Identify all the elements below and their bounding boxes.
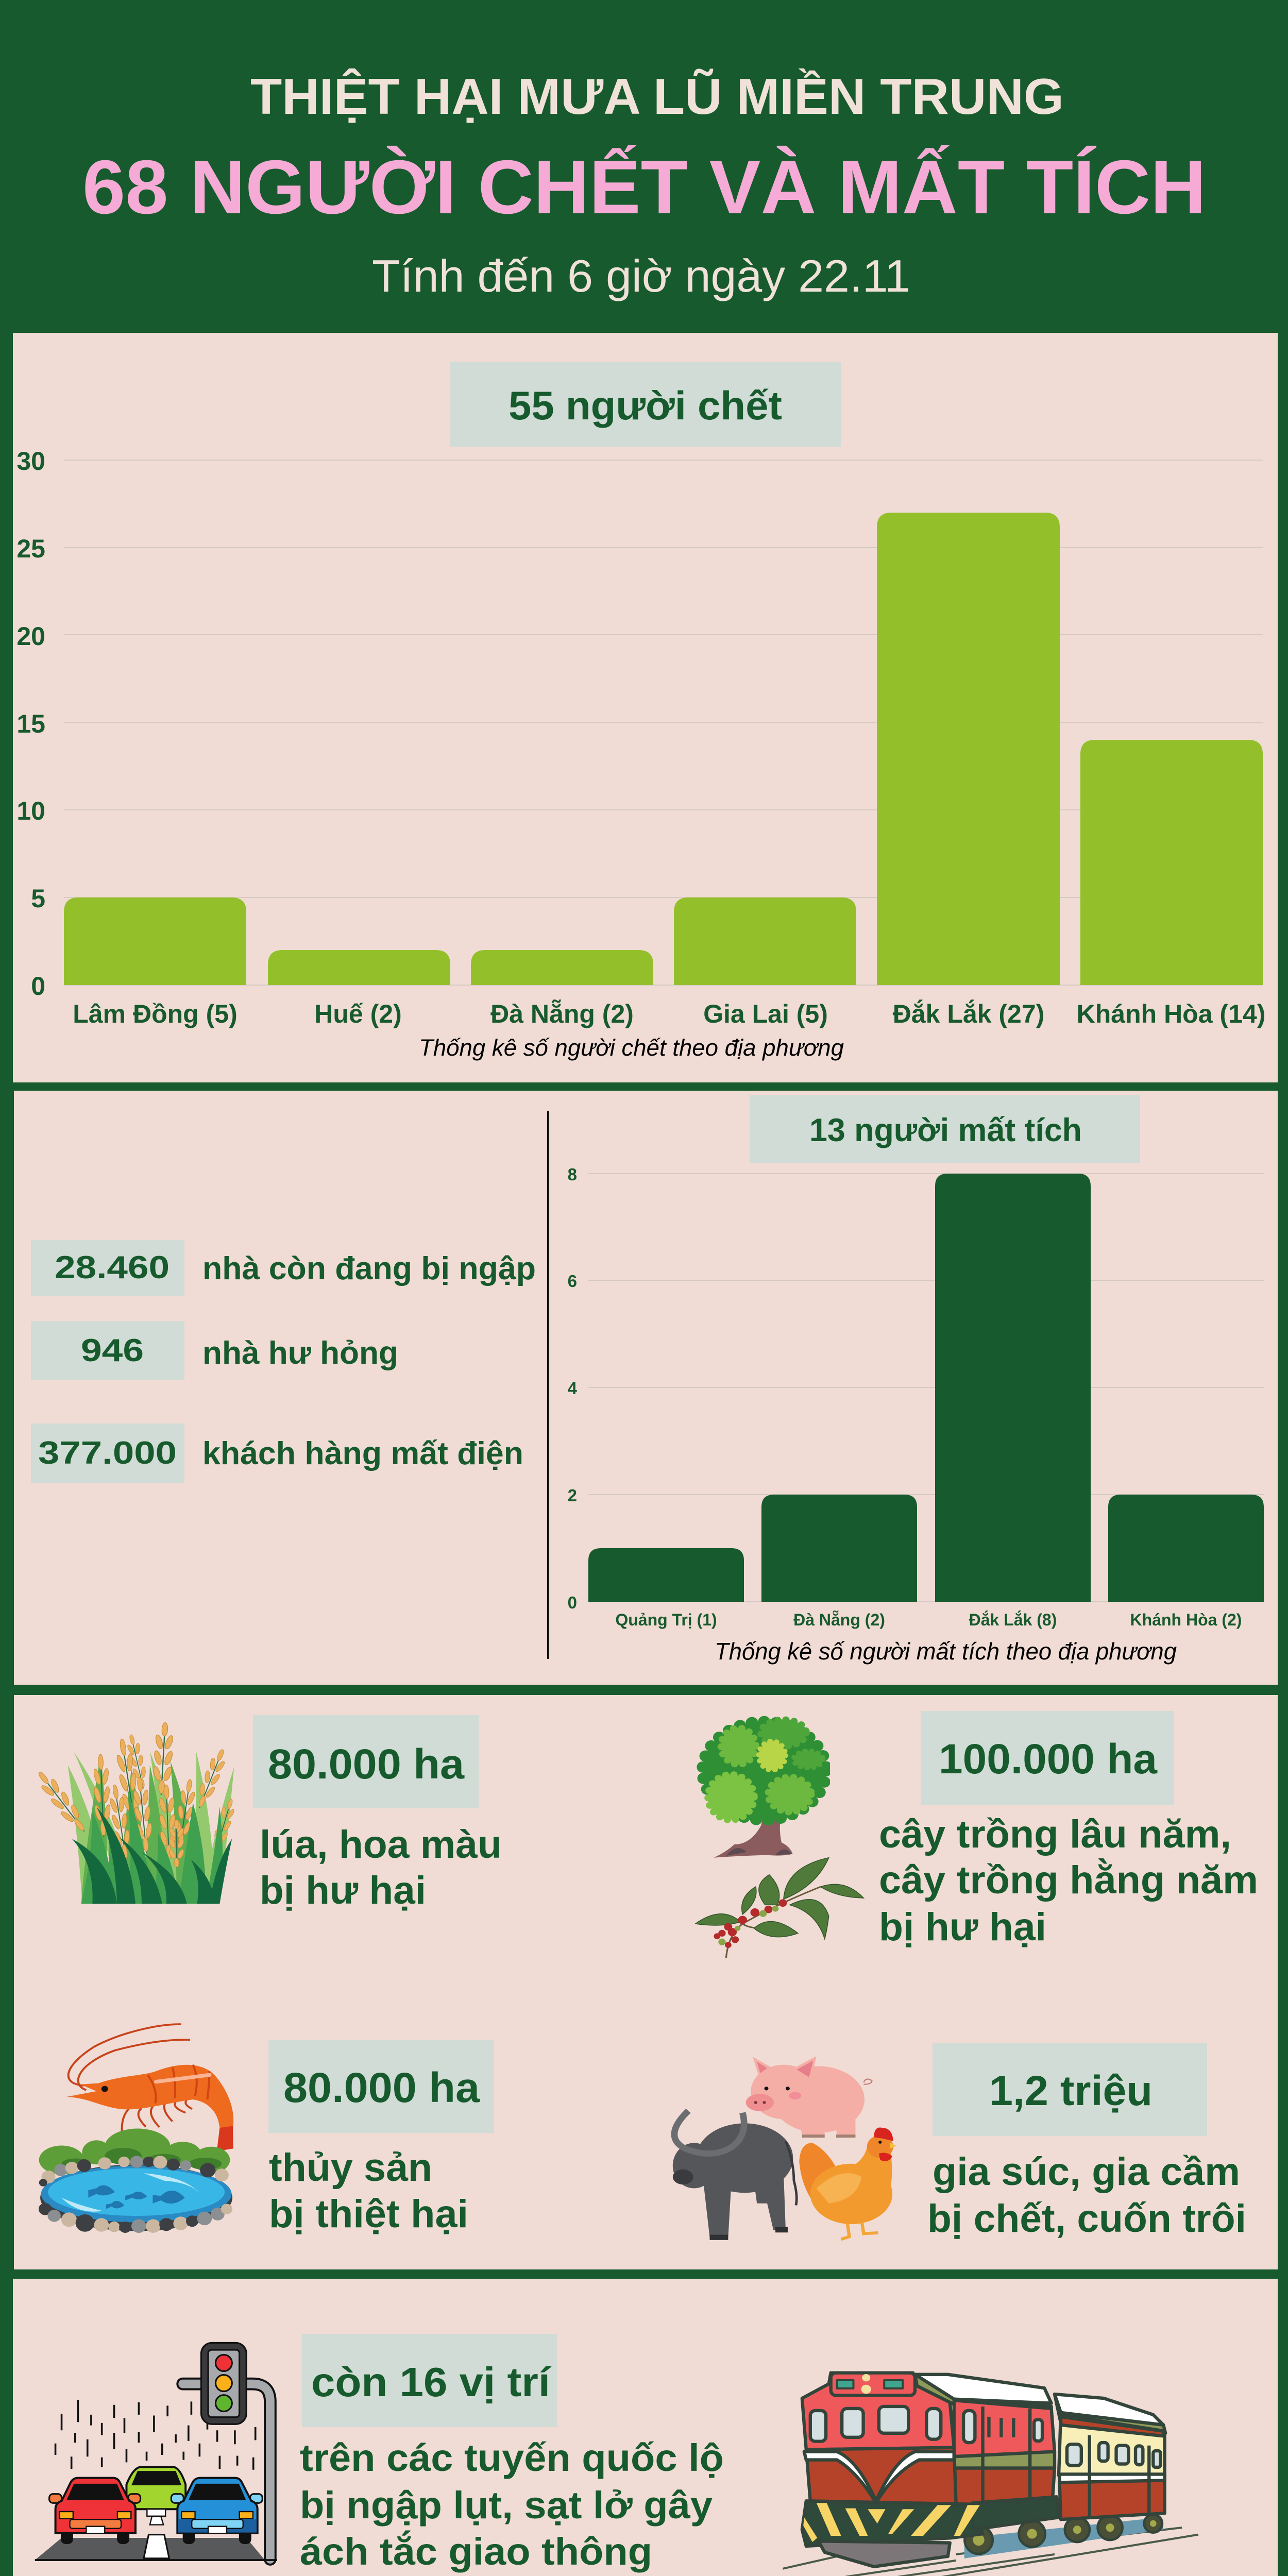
y axis labels: 20 bbox=[16, 622, 45, 651]
heading: 13 missing bbox=[750, 1095, 1140, 1163]
panel background bbox=[13, 333, 1278, 1082]
icon: tree and coffee branch bbox=[696, 1720, 863, 1958]
stat: flooded houses: 28.460 bbox=[55, 1250, 170, 1285]
icon: shrimp and fish pond bbox=[39, 2024, 233, 2233]
stat: livestock: bị chết, cuốn trôi bbox=[927, 2197, 1246, 2241]
stat: rice area: lúa, hoa màu bbox=[260, 1823, 502, 1867]
y axis labels bbox=[568, 1165, 578, 1612]
stat: rice area: 80.000 ha bbox=[268, 1741, 465, 1788]
stat: national roads: ách tắc giao thông bbox=[300, 2530, 652, 2573]
header title block bbox=[82, 68, 1206, 301]
subtitle date: Tính đến 6 giờ ngày 22.11 bbox=[372, 250, 910, 301]
stat: national roads: trên các tuyến quốc lộ bbox=[300, 2436, 724, 2479]
y axis labels: 2 bbox=[568, 1486, 577, 1505]
stat: damaged houses: nhà hư hỏng bbox=[202, 1335, 398, 1371]
x axis labels: Đà Nẵng (2) bbox=[793, 1611, 885, 1629]
stat: perennial crops bbox=[879, 1711, 1258, 1949]
stat: aquaculture: thủy sản bbox=[269, 2146, 432, 2190]
stat: perennial crops: 100.000 ha bbox=[939, 1736, 1158, 1783]
x axis labels: Quảng Trị (1) bbox=[615, 1611, 717, 1629]
title line 2: 68 NGƯỜI CHẾT VÀ MẤT TÍCH bbox=[82, 144, 1206, 230]
stat: aquaculture bbox=[268, 2040, 494, 2236]
heading: 13 missing: 13 người mất tích bbox=[809, 1112, 1082, 1148]
bar chart: missing by locality bbox=[588, 1174, 1264, 1602]
stat: power outage: 377.000 bbox=[38, 1435, 177, 1471]
x axis labels bbox=[73, 999, 1265, 1028]
stat: power outage bbox=[31, 1423, 523, 1483]
x axis labels: Đắk Lắk (27) bbox=[893, 999, 1044, 1028]
chart caption: Thống kê số người mất tích theo địa phương bbox=[715, 1638, 1177, 1665]
heading: 55 deaths: 55 người chết bbox=[509, 383, 782, 428]
stat: rice area bbox=[253, 1715, 502, 1912]
stat: perennial crops: cây trồng hằng năm bbox=[879, 1858, 1258, 1902]
title line 1: THIỆT HẠI MƯA LŨ MIỀN TRUNG bbox=[250, 68, 1064, 125]
y axis labels: 15 bbox=[16, 709, 45, 738]
stat: damaged houses bbox=[31, 1321, 398, 1380]
y axis labels: 6 bbox=[568, 1272, 577, 1291]
panel: deaths chart bbox=[13, 333, 1278, 1082]
panel: transport damage bbox=[13, 2279, 1278, 2576]
y axis labels: 10 bbox=[16, 796, 45, 825]
panel: agriculture damage bbox=[14, 1695, 1278, 2269]
y axis labels: 30 bbox=[16, 447, 45, 476]
stat: aquaculture: 80.000 ha bbox=[283, 2064, 480, 2111]
x axis labels: Đà Nẵng (2) bbox=[490, 999, 634, 1028]
stat: national roads bbox=[300, 2334, 724, 2573]
panel: missing chart and housing stats bbox=[14, 1091, 1278, 1685]
stat: damaged houses: 946 bbox=[81, 1333, 144, 1368]
stat: aquaculture: bị thiệt hại bbox=[269, 2192, 468, 2236]
x axis labels: Khánh Hòa (14) bbox=[1077, 999, 1265, 1028]
y axis labels: 0 bbox=[568, 1593, 577, 1612]
stat: national roads: bị ngập lụt, sạt lở gây bbox=[300, 2484, 713, 2527]
x axis labels: Khánh Hòa (2) bbox=[1130, 1611, 1242, 1629]
bar chart: deaths by locality bbox=[64, 513, 1263, 985]
stat: national roads: còn 16 vị trí bbox=[311, 2359, 552, 2405]
panel background bbox=[14, 1091, 1278, 1685]
y axis labels: 25 bbox=[16, 534, 45, 563]
y axis labels bbox=[16, 447, 45, 1001]
icon: traffic jam in rain bbox=[35, 2343, 277, 2560]
stat: perennial crops: cây trồng lâu năm, bbox=[879, 1812, 1231, 1856]
chart caption: Thống kê số người chết theo địa phương bbox=[419, 1035, 844, 1061]
x axis labels: Lâm Đồng (5) bbox=[73, 999, 238, 1028]
x axis labels bbox=[615, 1611, 1242, 1629]
icon: rice plants bbox=[32, 1722, 239, 1904]
y axis labels: 0 bbox=[31, 972, 45, 1001]
panel background bbox=[14, 1695, 1278, 2269]
x axis labels: Gia Lai (5) bbox=[703, 999, 828, 1028]
x axis labels: Đắk Lắk (8) bbox=[969, 1611, 1057, 1629]
stat: livestock: gia súc, gia cầm bbox=[933, 2150, 1240, 2194]
stat: flooded houses bbox=[31, 1240, 536, 1296]
icon: pig, buffalo and chicken bbox=[673, 2056, 896, 2239]
stat: power outage: khách hàng mất điện bbox=[202, 1436, 523, 1471]
stat: rice area: bị hư hại bbox=[260, 1869, 426, 1912]
stat: flooded houses: nhà còn đang bị ngập bbox=[202, 1251, 536, 1286]
stat: livestock: 1,2 triệu bbox=[989, 2067, 1153, 2114]
panel background bbox=[13, 2279, 1278, 2576]
y axis labels: 5 bbox=[31, 884, 45, 913]
x axis labels: Huế (2) bbox=[314, 999, 402, 1028]
y axis labels: 8 bbox=[568, 1165, 577, 1184]
stat: perennial crops: bị hư hại bbox=[879, 1905, 1046, 1949]
heading: 55 deaths bbox=[450, 362, 841, 447]
y axis labels: 4 bbox=[568, 1379, 578, 1398]
stat: livestock bbox=[927, 2043, 1246, 2241]
icon: train bbox=[783, 2373, 1198, 2576]
